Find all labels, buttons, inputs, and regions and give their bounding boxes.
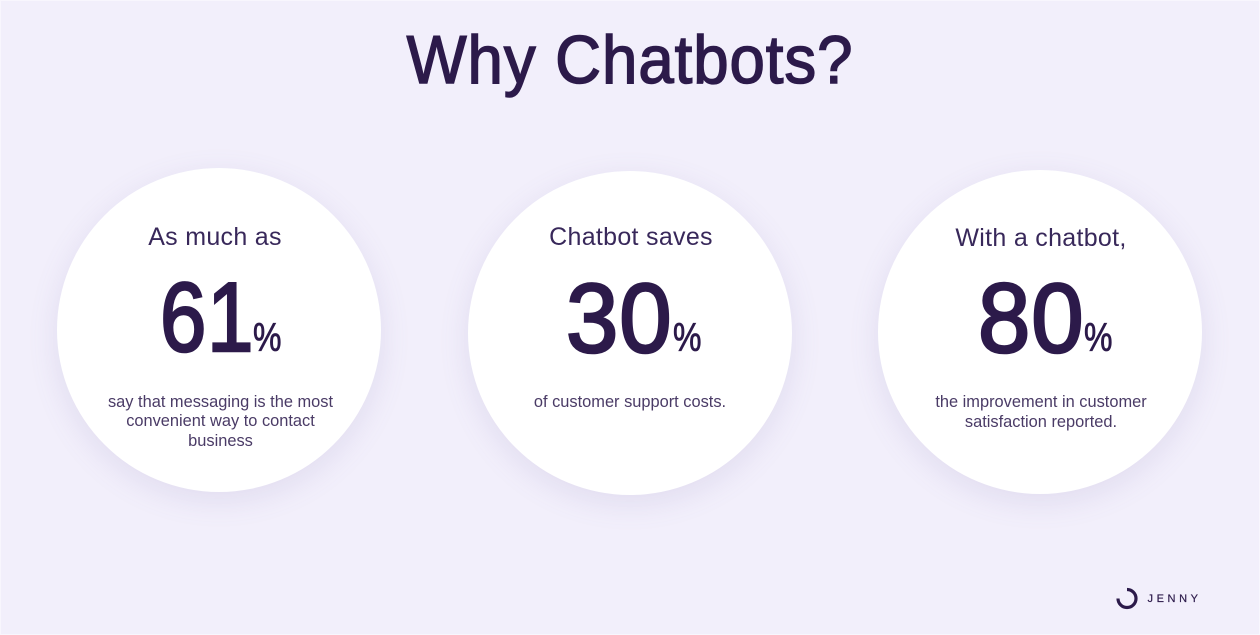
percent sign: % [253,316,281,360]
panel: 30 percent [468,171,792,495]
description [108,392,333,450]
percent sign: % [673,316,701,360]
icon: logo ring [1116,588,1138,610]
number: 30 [566,263,673,373]
number: 80 [978,263,1085,373]
number: 61 [160,262,254,372]
description: convenient way to contact [126,412,315,430]
lead text: As much as [148,223,282,251]
description: of customer support costs. [534,392,726,410]
panel: 61 percent [57,168,381,492]
description: business [188,432,253,450]
logo: JENNY [1116,588,1202,610]
percent sign: % [1084,316,1112,360]
panel: 80 percent [878,170,1202,494]
description: say that messaging is the most [108,392,333,410]
lead text: Chatbot saves [549,223,713,251]
logo wordmark: JENNY [1148,593,1202,605]
description [935,392,1147,430]
description: the improvement in customer [935,392,1147,410]
description: satisfaction reported. [965,412,1117,430]
title: Why Chatbots? [407,22,853,98]
lead text: With a chatbot, [955,224,1127,252]
